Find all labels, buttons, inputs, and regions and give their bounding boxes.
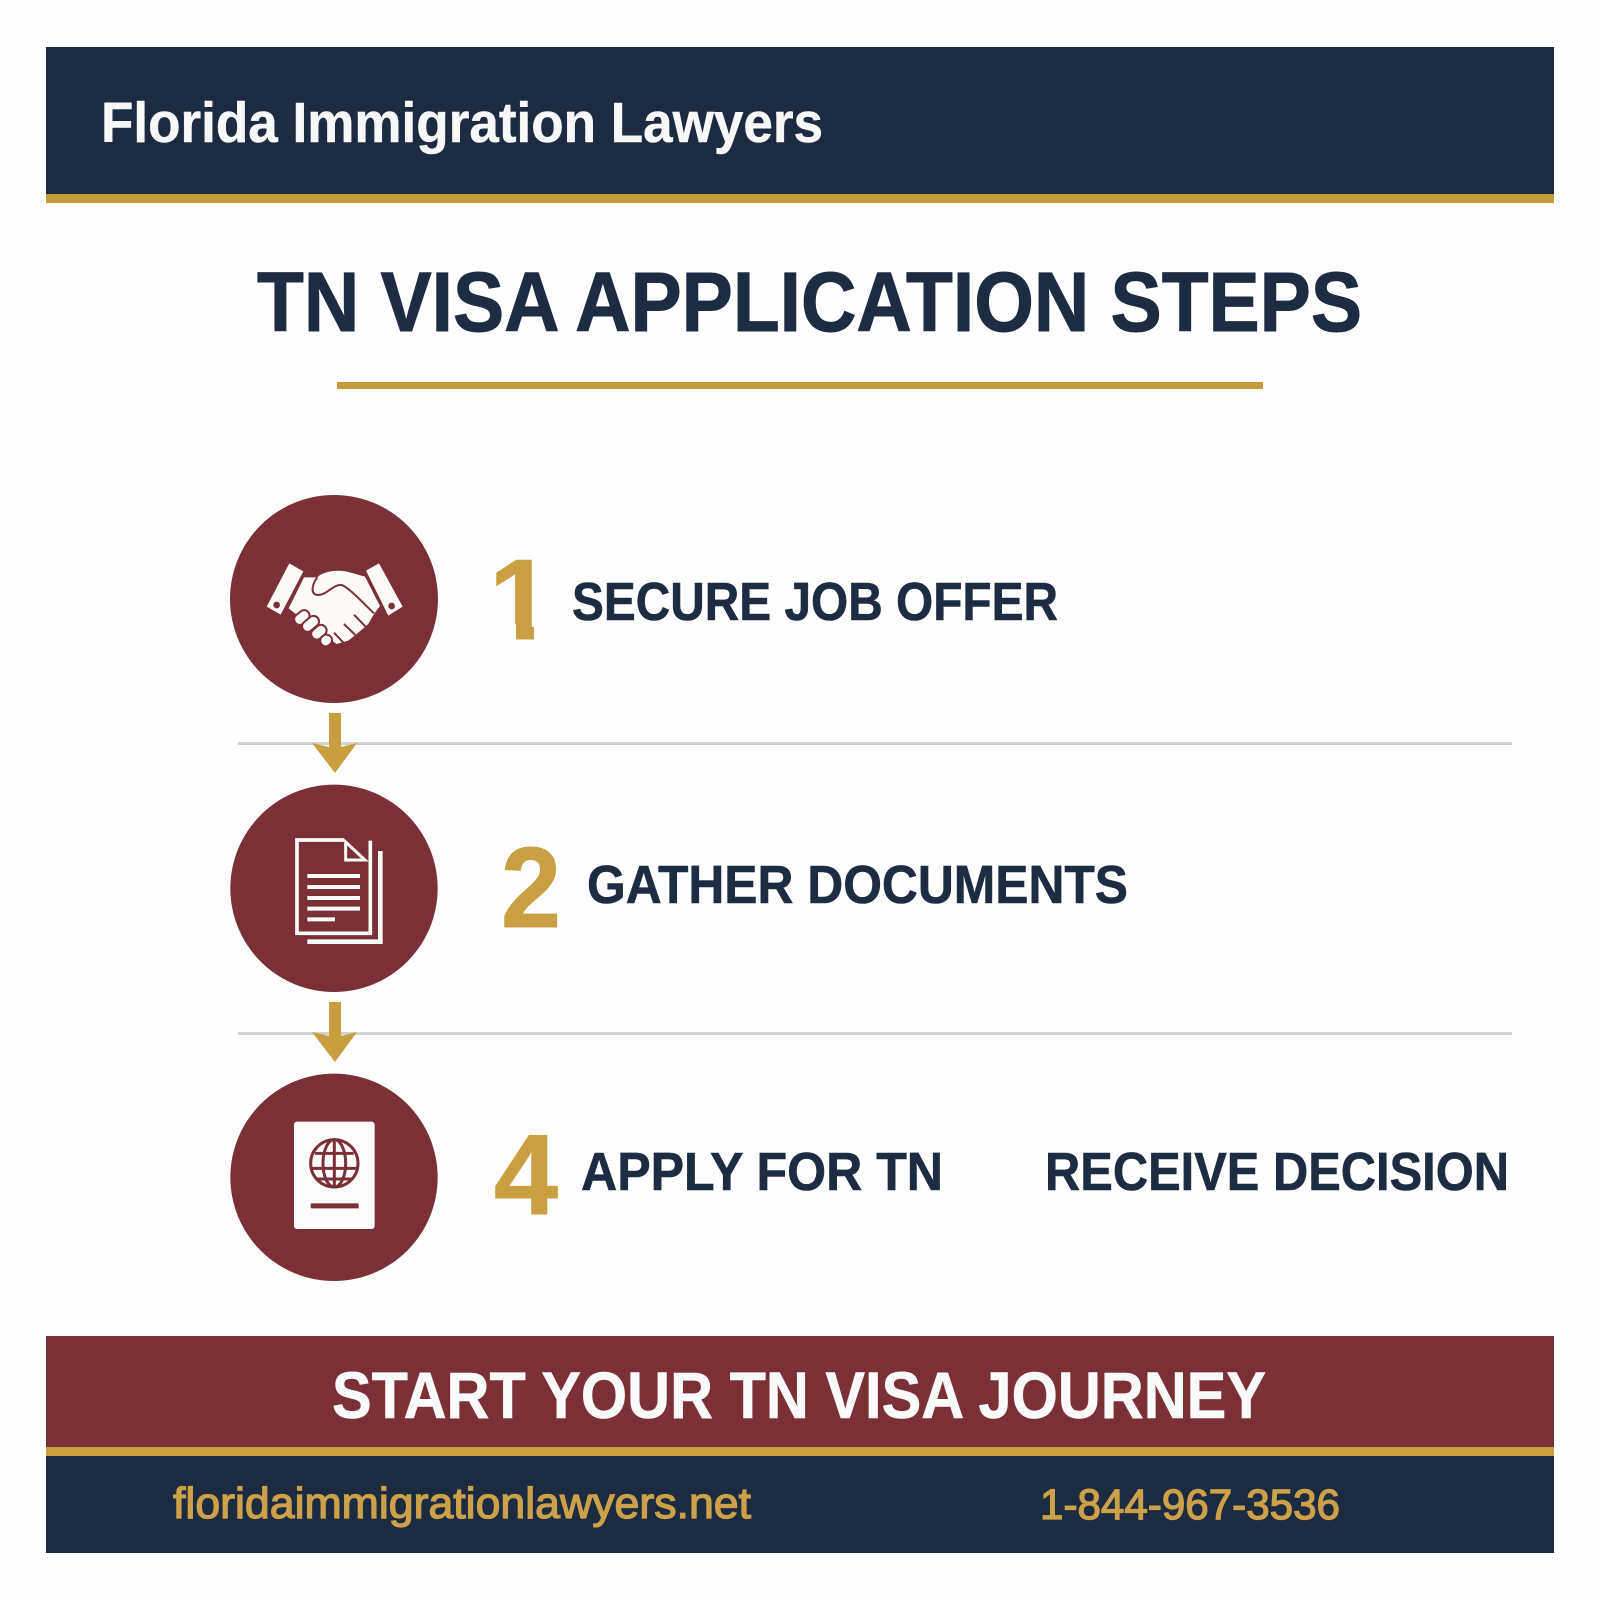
arrow 2	[312, 1002, 357, 1062]
step 1 icon: handshake	[230, 495, 438, 703]
step 4 number: 4	[494, 1112, 558, 1239]
phone number: 1-844-967-3536	[1040, 1481, 1340, 1529]
call-to-action text: START YOUR TN VISA JOURNEY	[332, 1358, 1266, 1432]
website: floridaimmigrationlawyers.net	[173, 1479, 751, 1528]
title underline	[337, 382, 1263, 389]
step label: receive decision: RECEIVE DECISION	[1045, 1142, 1509, 1202]
footer band	[46, 1447, 1554, 1553]
header band	[46, 47, 1554, 203]
divider 1	[238, 742, 1512, 745]
call-to-action band	[46, 1336, 1554, 1448]
title: TN VISA APPLICATION STEPS	[257, 255, 1362, 349]
step 1 label: SECURE JOB OFFER	[572, 572, 1058, 632]
step 2 label: GATHER DOCUMENTS	[587, 855, 1128, 915]
arrow 1	[312, 713, 357, 773]
step 3 icon: passport	[230, 1074, 438, 1281]
step 1 number: 1	[489, 537, 552, 664]
step 2 icon: documents	[230, 785, 438, 992]
step 2 number: 2	[501, 825, 561, 952]
divider 2	[238, 1032, 1512, 1035]
step 4 label: apply for TN: APPLY FOR TN	[581, 1142, 943, 1202]
header brand name: Florida Immigration Lawyers	[101, 91, 823, 155]
